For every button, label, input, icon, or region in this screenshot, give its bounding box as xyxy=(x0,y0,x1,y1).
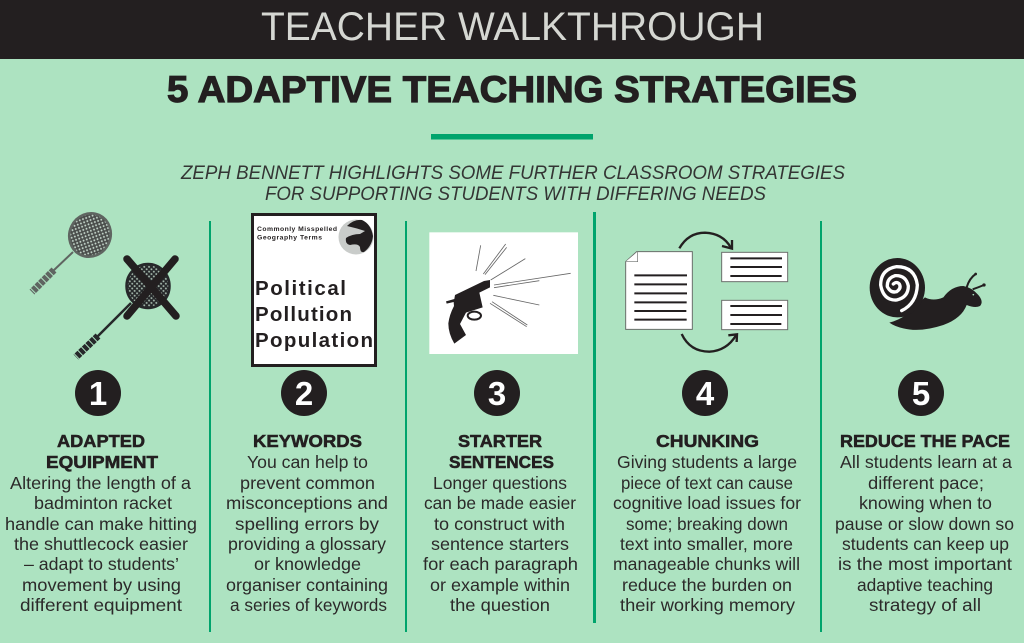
heading: adapted equipment: EQUIPMENT xyxy=(46,452,158,472)
text: keywords: a series of keywords xyxy=(230,595,387,615)
text: chunking: Giving students a large xyxy=(617,452,797,472)
heading: keywords: KEYWORDS xyxy=(253,431,362,451)
subtitle: ZEPH BENNETT HIGHLIGHTS SOME FURTHER CLASSROOM STRATEGIES xyxy=(180,163,845,184)
number badge 3: 3 xyxy=(488,375,506,412)
text: chunking: cognitive load issues for xyxy=(613,493,801,513)
text: chunking: their working memory xyxy=(620,595,795,615)
number badge 1 xyxy=(75,370,121,416)
text: starter sentences: can be made easier xyxy=(424,493,576,513)
text: reduce the pace xyxy=(835,452,1014,615)
number badge 2: 2 xyxy=(295,375,313,412)
text: reduce the pace: students can keep up xyxy=(842,534,1009,554)
icon: revolver firing sentences xyxy=(429,232,578,354)
icon: keyword sheet: Pollution xyxy=(255,303,352,326)
text: keywords: prevent common xyxy=(240,473,375,493)
panel 3: starter sentences xyxy=(423,232,578,615)
icon: keyword sheet: Population xyxy=(255,329,373,352)
text: adapted equipment: handle can make hitting xyxy=(5,514,197,534)
panel 4: chunking xyxy=(613,233,801,615)
subtitle xyxy=(180,163,845,205)
text: keywords: misconceptions and xyxy=(226,493,388,513)
text: reduce the pace: knowing when to xyxy=(859,493,992,513)
text: adapted equipment: the shuttlecock easier xyxy=(14,534,188,554)
icon: snail xyxy=(870,258,986,330)
text: starter sentences xyxy=(423,473,578,615)
text: chunking: text into smaller, more xyxy=(620,534,793,554)
text: keywords: spelling errors by xyxy=(235,514,379,534)
number badge 1: 1 xyxy=(89,375,107,412)
header band xyxy=(0,0,1024,59)
panel 5: reduce the pace xyxy=(835,258,1014,615)
text: keywords: or knowledge xyxy=(254,554,361,574)
number badge 4 xyxy=(682,370,728,416)
text: starter sentences: the question xyxy=(450,595,550,615)
text: chunking xyxy=(613,452,801,615)
heading: reduce the pace: REDUCE THE PACE xyxy=(840,431,1010,451)
text: starter sentences: to construct with xyxy=(434,514,565,534)
number badge 2 xyxy=(281,370,327,416)
text: reduce the pace: is the most important xyxy=(838,554,1012,574)
icon: badminton rackets crossed out xyxy=(32,206,176,357)
heading: starter sentences: STARTER xyxy=(458,431,542,451)
text: starter sentences: or example within xyxy=(430,575,570,595)
subtitle: FOR SUPPORTING STUDENTS WITH DIFFERING NEEDS xyxy=(265,184,766,205)
text: reduce the pace: pause or slow down so xyxy=(835,514,1014,534)
accent bar xyxy=(431,134,593,140)
icon: keyword sheet: Commonly Misspelled xyxy=(257,226,337,233)
panel 2: keywords xyxy=(226,214,388,615)
heading: chunking: CHUNKING xyxy=(656,431,759,451)
icon: keyword sheet xyxy=(252,214,376,366)
text: keywords: organiser containing xyxy=(226,575,388,595)
icon: document split into chunks xyxy=(626,233,788,352)
text: chunking: some; breaking down xyxy=(626,514,788,534)
text: chunking: manageable chunks will xyxy=(613,554,800,574)
text: reduce the pace: strategy of all xyxy=(869,595,981,615)
text: chunking: piece of text can cause xyxy=(621,473,793,493)
text: keywords: You can help to xyxy=(247,452,368,472)
icon: keyword sheet: Political xyxy=(255,277,346,300)
text: keywords xyxy=(226,452,388,615)
icon: keyword sheet: Geography Terms xyxy=(257,234,322,242)
main heading: 5 ADAPTIVE TEACHING STRATEGIES xyxy=(167,68,857,110)
text: reduce the pace: different pace; xyxy=(868,473,984,493)
number badge 5: 5 xyxy=(912,375,930,412)
heading: starter sentences: SENTENCES xyxy=(449,452,554,472)
text: keywords: providing a glossary xyxy=(228,534,386,554)
text: starter sentences: sentence starters xyxy=(431,534,569,554)
number badge 4: 4 xyxy=(696,375,715,412)
header band: TEACHER WALKTHROUGH xyxy=(261,5,764,49)
text: chunking: reduce the burden on xyxy=(622,575,792,595)
heading: adapted equipment xyxy=(46,431,158,472)
text: adapted equipment: – adapt to students’ xyxy=(24,554,179,574)
text: starter sentences: Longer questions xyxy=(433,473,567,493)
text: adapted equipment xyxy=(5,473,197,615)
text: adapted equipment: Altering the length of a xyxy=(10,473,191,493)
heading: adapted equipment: ADAPTED xyxy=(57,431,145,451)
text: reduce the pace: adaptive teaching xyxy=(857,575,993,595)
heading: starter sentences xyxy=(449,431,554,472)
text: adapted equipment: different equipment xyxy=(20,595,182,615)
icon: globe xyxy=(338,220,374,254)
panel 1: adapted equipment xyxy=(5,206,197,615)
text: starter sentences: for each paragraph xyxy=(423,554,578,574)
text: adapted equipment: badminton racket xyxy=(34,493,172,513)
number badge 5 xyxy=(898,370,944,416)
text: reduce the pace: All students learn at a xyxy=(840,452,1012,472)
text: adapted equipment: movement by using xyxy=(22,575,181,595)
number badge 3 xyxy=(474,370,520,416)
